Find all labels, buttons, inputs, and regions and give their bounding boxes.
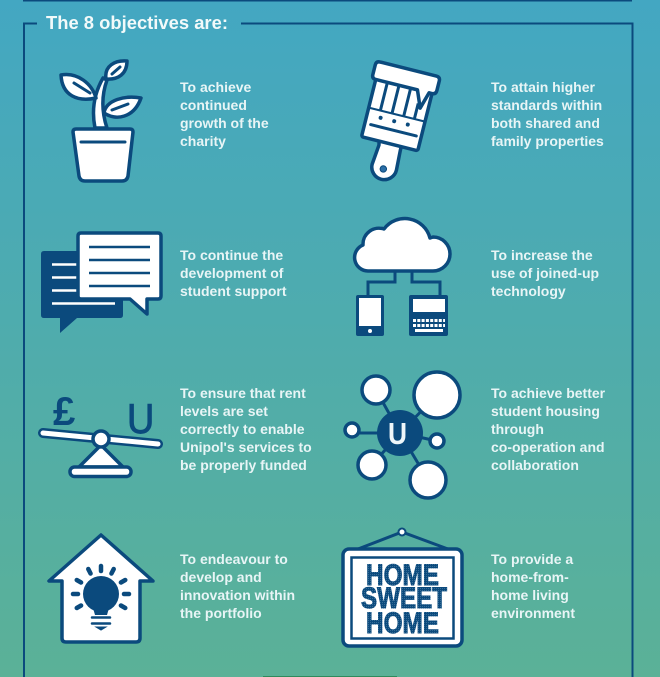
text: objective 8: home-from- (491, 569, 569, 585)
icon: paint brush (349, 61, 440, 187)
objective 3: student support (41, 233, 287, 333)
icon: home sweet home sign (343, 528, 462, 646)
icon: network hub: U (388, 417, 407, 452)
icon: speech bubbles (41, 233, 161, 333)
text: objective 5: To ensure that rent (180, 385, 306, 401)
objective 5: rent levels (43, 385, 312, 476)
text: objective 7: the portfolio (180, 605, 262, 621)
text: objective 7: develop and (180, 569, 262, 585)
text: objective 8: environment (491, 605, 575, 621)
icon: network hub (345, 372, 460, 498)
text: objective 3: development of (180, 265, 284, 281)
text: objective 4: use of joined-up (491, 265, 599, 281)
icon: balance scale (43, 390, 158, 476)
bottom green tab (263, 676, 397, 677)
objective 7: innovation (49, 535, 295, 642)
heading: The 8 objectives are: (46, 12, 228, 33)
text: objective 6: To achieve better (491, 385, 606, 401)
text: objective 6: collaboration (491, 457, 579, 473)
text: objective 8: home living (491, 587, 569, 603)
icon: home sweet home sign: SWEET (361, 582, 447, 615)
text: objective 5: correctly to enable (180, 421, 305, 437)
icon: plant in pot (61, 61, 141, 181)
text: objective 3: student support (180, 283, 287, 299)
text: objective 7: innovation within (180, 587, 295, 603)
text: objective 2: standards within (491, 97, 602, 113)
icon: cloud and devices (355, 219, 450, 336)
text: objective 5: Unipol's services to (180, 439, 312, 455)
top rule (23, 0, 632, 2)
icon: home sweet home sign: HOME (366, 607, 439, 640)
objective 4: joined-up technology (355, 219, 599, 336)
icon: house with light bulb (49, 535, 153, 642)
icon: balance scale: U (127, 396, 154, 442)
text: objective 2: family properties (491, 133, 604, 149)
text: objective 3: To continue the (180, 247, 283, 263)
text: objective 2: To attain higher (491, 79, 596, 95)
objective 2: higher standards (349, 61, 604, 187)
icon: home sweet home sign: HOME (366, 559, 439, 592)
text: objective 6: student housing (491, 403, 600, 419)
text: objective 6: through (491, 421, 544, 437)
text: objective 5: levels are set (180, 403, 268, 419)
text: objective 1: To achieve (180, 79, 252, 95)
text: objective 2: both shared and (491, 115, 600, 131)
text: objective 4: technology (491, 283, 566, 299)
text: objective 1: growth of the (180, 115, 269, 131)
text: objective 1: continued (180, 97, 247, 113)
objective 1: continued growth (61, 61, 269, 181)
objective 6: co-operation (345, 372, 606, 498)
text: objective 1: charity (180, 133, 226, 149)
objective 8: home from home (343, 528, 575, 646)
text: objective 6: co-operation and (491, 439, 605, 455)
text: objective 8: To provide a (491, 551, 573, 567)
text: objective 5: be properly funded (180, 457, 307, 473)
text: objective 4: To increase the (491, 247, 593, 263)
text: objective 7: To endeavour to (180, 551, 288, 567)
icon: balance scale: £ (53, 390, 75, 434)
